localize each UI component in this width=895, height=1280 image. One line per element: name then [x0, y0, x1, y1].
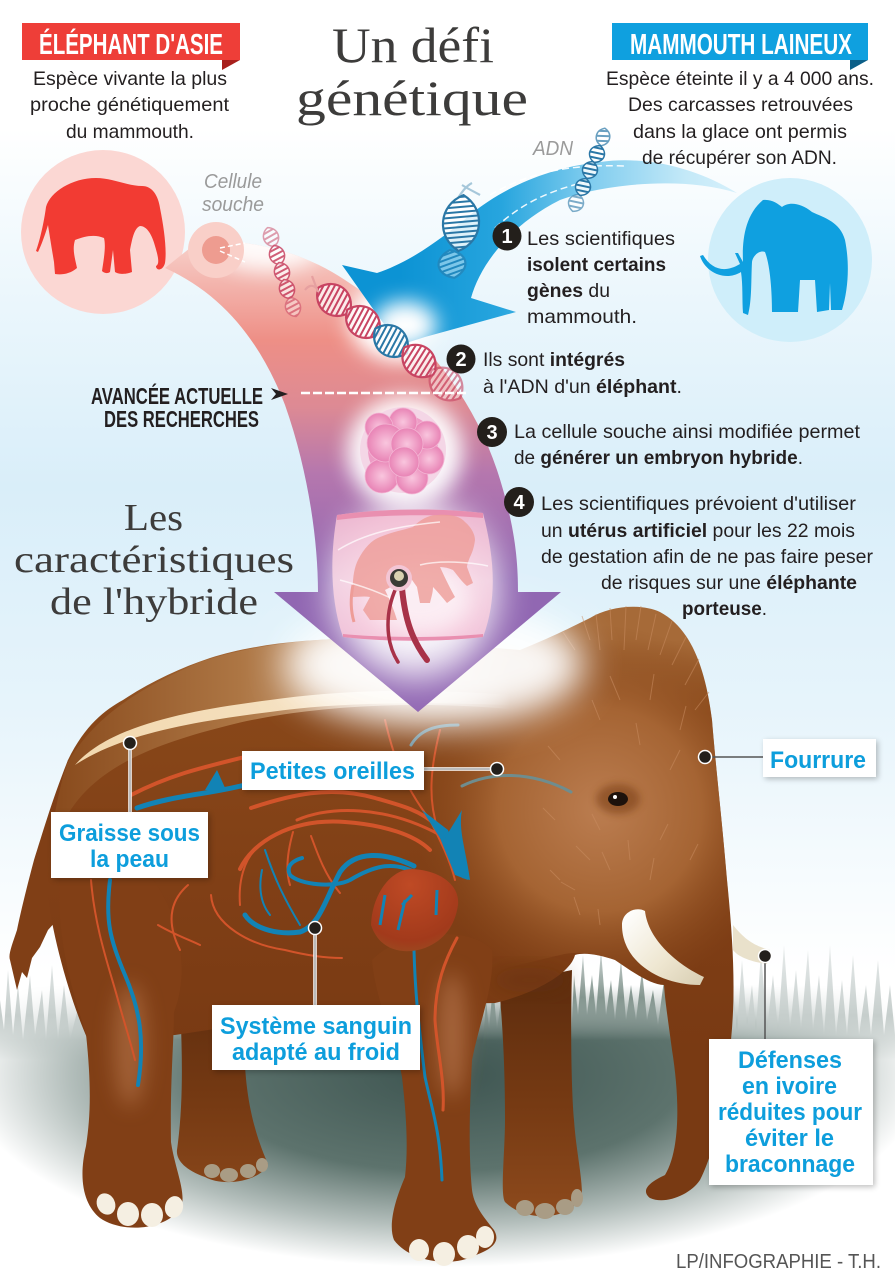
step 4: porteuse.: [682, 598, 767, 620]
step 1: [492, 222, 675, 328]
tail: [9, 760, 75, 990]
callout: tusks: braconnage: [725, 1151, 855, 1178]
fat layer: [56, 640, 500, 812]
veins: [91, 720, 571, 1180]
callout: blood system: [212, 922, 422, 1072]
far back leg: [177, 1000, 268, 1182]
far front toes: [516, 1189, 583, 1219]
curved blue arrow: [342, 160, 737, 349]
near back leg: [59, 860, 183, 1228]
far tusk: [733, 925, 770, 964]
heading: hybrid characteristics: de l'hybride: [50, 581, 258, 623]
white glow over mammoth back: [285, 603, 585, 727]
leg highlights: [114, 973, 466, 1107]
step 3: de générer un embryon hybride.: [514, 447, 803, 469]
woolly mammoth text: dans la glace ont permis: [633, 121, 847, 143]
callout: fur: Fourrure: [770, 747, 866, 774]
ground shadow: [0, 988, 895, 1262]
eye: [596, 784, 640, 814]
research progress marker: [91, 382, 466, 432]
step 4: un utérus artificiel pour les 22 mois: [541, 520, 855, 542]
callout: blood system: Système sanguin: [220, 1013, 412, 1040]
callout: tusks: [709, 950, 875, 1187]
panel: elephant circle: [21, 150, 185, 314]
panel: asian elephant header: ÉLÉPHANT D'ASIE: [39, 27, 223, 61]
callout: tusks: en ivoire: [742, 1073, 837, 1100]
research progress marker: DES RECHERCHES: [104, 406, 259, 432]
asian elephant text: du mammouth.: [66, 121, 194, 143]
step 3: 3: [486, 422, 498, 444]
asian elephant text: Espèce vivante la plus: [33, 68, 227, 90]
icon: mammoth silhouette: [700, 200, 848, 315]
callout: fat: Graisse sous: [59, 820, 200, 847]
callout: tusks: éviter le: [745, 1125, 834, 1152]
callout: small ears: Petites oreilles: [250, 758, 415, 785]
artificial uterus with foetus: [332, 509, 493, 662]
asian elephant text: [30, 68, 230, 143]
credit: LP/INFOGRAPHIE - T.H.: [676, 1251, 881, 1273]
DNA: blue strand on arrow: [436, 183, 481, 280]
woolly mammoth text: de récupérer son ADN.: [642, 147, 837, 169]
stem cell: [188, 222, 245, 278]
step 2: [446, 344, 682, 398]
woolly mammoth text: Des carcasses retrouvées: [628, 94, 853, 116]
label: stem cell: Cellule: [204, 171, 262, 193]
near tusk: [622, 909, 704, 985]
foetus: [353, 515, 475, 620]
step 2: à l'ADN d'un éléphant.: [483, 376, 682, 398]
callout: small ears: [242, 751, 504, 792]
fur strokes: [543, 606, 709, 925]
belly shadow: [490, 968, 570, 992]
far back toes: [204, 1158, 268, 1182]
asian elephant text: proche génétiquement: [30, 94, 230, 116]
label: stem cell: souche: [202, 194, 264, 216]
title: génétique: [296, 70, 528, 126]
step 4: 4: [513, 492, 525, 514]
DNA: small blue strand near ADN: [566, 127, 611, 214]
callout: tusks: réduites pour: [718, 1099, 862, 1126]
body and head: [46, 607, 734, 1200]
near front toes: [409, 1226, 494, 1266]
step 4: de gestation afin de ne pas faire peser: [541, 546, 874, 568]
near front leg: [372, 934, 496, 1262]
embryo cluster: [360, 407, 446, 494]
callout: tusks: Défenses: [738, 1047, 842, 1074]
curved red-to-purple arrow: [165, 219, 561, 712]
callout: fat: la peau: [90, 846, 169, 873]
callout: blood system: adapté au froid: [232, 1039, 400, 1066]
heading: hybrid characteristics: Les: [124, 497, 183, 539]
step 4: Les scientifiques prévoient d'utiliser: [541, 493, 857, 515]
grass: [0, 945, 895, 1060]
label: stem cell: [202, 171, 264, 216]
panel: woolly mammoth header: [612, 23, 868, 70]
far front leg: [499, 970, 582, 1216]
DNA: large composite strand: [305, 276, 471, 409]
step 2: 2: [455, 349, 467, 371]
step 1: Les scientifiques: [527, 228, 675, 250]
heading: hybrid characteristics: [14, 497, 294, 623]
step 1: gènes du: [527, 280, 610, 302]
near back toes: [93, 1190, 186, 1227]
icon: elephant silhouette: [36, 178, 166, 274]
title: Un défi: [332, 17, 494, 73]
step 4: [504, 487, 874, 620]
step 1: isolent certains: [527, 254, 666, 276]
step 1: mammouth.: [527, 306, 637, 328]
callout: fur: [698, 739, 878, 779]
step 1: 1: [501, 226, 513, 248]
step 2: Ils sont intégrés: [483, 349, 625, 371]
head shading: [415, 607, 731, 1040]
callout: fat: [51, 736, 210, 880]
woolly mammoth text: [606, 68, 874, 169]
panel: mammoth circle: [700, 178, 872, 342]
step 3: La cellule souche ainsi modifiée permet: [514, 421, 861, 443]
label: ADN: ADN: [532, 138, 574, 160]
heart: [371, 869, 458, 951]
step 4: de risques sur une éléphante: [601, 572, 857, 594]
DNA: small red strand: [261, 225, 303, 319]
title: [296, 17, 528, 126]
mammoth illustration: [9, 606, 770, 1266]
panel: asian elephant header: [22, 23, 240, 70]
step 3: [477, 417, 861, 469]
heading: hybrid characteristics: caractéristiques: [14, 539, 294, 581]
umbilical cord: [388, 588, 398, 662]
research progress marker: AVANCÉE ACTUELLE: [91, 382, 263, 409]
woolly mammoth text: Espèce éteinte il y a 4 000 ans.: [606, 68, 874, 90]
